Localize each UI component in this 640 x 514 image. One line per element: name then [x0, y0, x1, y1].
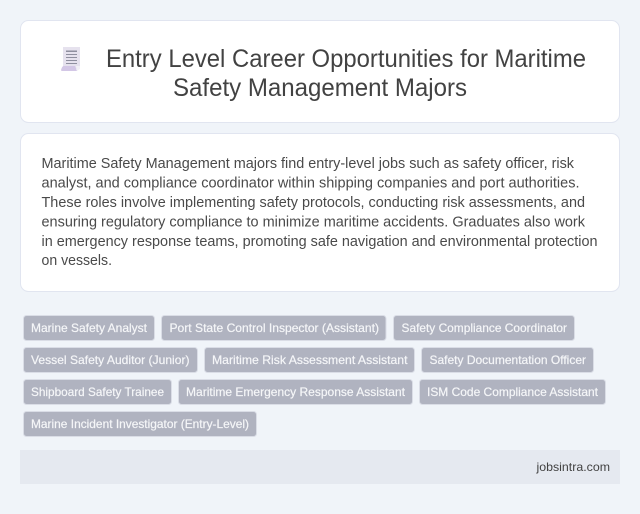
- tag: Vessel Safety Auditor: Vessel Safety Auditor (Junior): [31, 353, 190, 367]
- tag: Safety Compliance Coordinator: [394, 316, 574, 340]
- text block: description: These roles involve implementing safety protocols, conducting risk assessments, and: [42, 195, 585, 211]
- tag: Maritime Emergency Response Assistant: Maritime Emergency Response Assistant: [186, 385, 406, 399]
- tag: ISM Code Compliance Assistant: [420, 380, 606, 404]
- title: Safety Management Majors: [173, 74, 467, 102]
- tag: Marine Safety Analyst: Marine Safety Analyst: [31, 321, 148, 335]
- text block: description: Maritime Safety Management majors find entry-level jobs such as safety officer, risk: [42, 156, 575, 172]
- tag: Marine Safety Analyst: [24, 316, 154, 340]
- text block: description: [42, 156, 598, 269]
- text block: description: in emergency response teams, promoting safe navigation and environmental protection: [42, 234, 598, 250]
- tag: Marine Incident Investigator: [24, 412, 256, 436]
- footer source: jobsintra.com: [535, 460, 610, 474]
- tag: Safety Documentation Officer: Safety Documentation Officer: [430, 353, 586, 367]
- footer bar: [20, 450, 620, 484]
- tag: Shipboard Safety Trainee: [24, 380, 172, 404]
- career tags: [24, 316, 606, 436]
- text block: description: ensuring regulatory compliance to minimize maritime accidents. Graduates also work: [42, 214, 586, 230]
- tag: Safety Compliance Coordinator: Safety Compliance Coordinator: [402, 321, 567, 335]
- tag: Port State Control Inspector: Port State Control Inspector (Assistant): [170, 321, 379, 335]
- tag: Maritime Risk Assessment Assistant: Maritime Risk Assessment Assistant: [212, 353, 408, 367]
- tag: Marine Incident Investigator: Marine Incident Investigator (Entry-Level): [31, 417, 249, 431]
- tag: Port State Control Inspector: [162, 316, 386, 340]
- tag: ISM Code Compliance Assistant: ISM Code Compliance Assistant: [427, 385, 599, 399]
- title: [106, 45, 586, 102]
- panel: description: [20, 134, 620, 292]
- tag: Safety Documentation Officer: [422, 348, 594, 372]
- tag: Maritime Risk Assessment Assistant: [204, 348, 414, 372]
- panel: header: [20, 20, 620, 122]
- icon: document receipt: [61, 47, 80, 71]
- title: Entry Level Career Opportunities for Maritime: [106, 45, 586, 73]
- text block: description: on vessels.: [42, 253, 112, 269]
- tag: Vessel Safety Auditor: [24, 348, 198, 372]
- text block: description: analyst, and compliance coordinator within shipping companies and port authorities.: [42, 176, 580, 192]
- tag: Maritime Emergency Response Assistant: [178, 380, 412, 404]
- tag: Shipboard Safety Trainee: Shipboard Safety Trainee: [31, 385, 164, 399]
